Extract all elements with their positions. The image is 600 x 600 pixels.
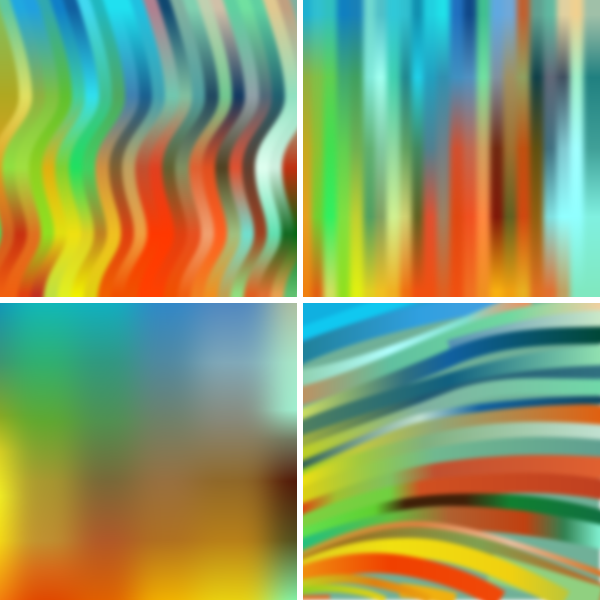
panel: fanned arcs (bottom right) bbox=[303, 303, 600, 600]
panel: wavy vertical strands (top left) bbox=[0, 0, 297, 297]
panel: soft blurred gradient (bottom left) bbox=[0, 303, 297, 600]
vertical streak columns bbox=[270, 0, 600, 300]
panel: straight vertical streaks (top right) bbox=[303, 0, 600, 297]
wavy strands bbox=[0, 0, 333, 305]
arc strands bbox=[280, 280, 600, 600]
blurred colour field bbox=[0, 300, 400, 600]
